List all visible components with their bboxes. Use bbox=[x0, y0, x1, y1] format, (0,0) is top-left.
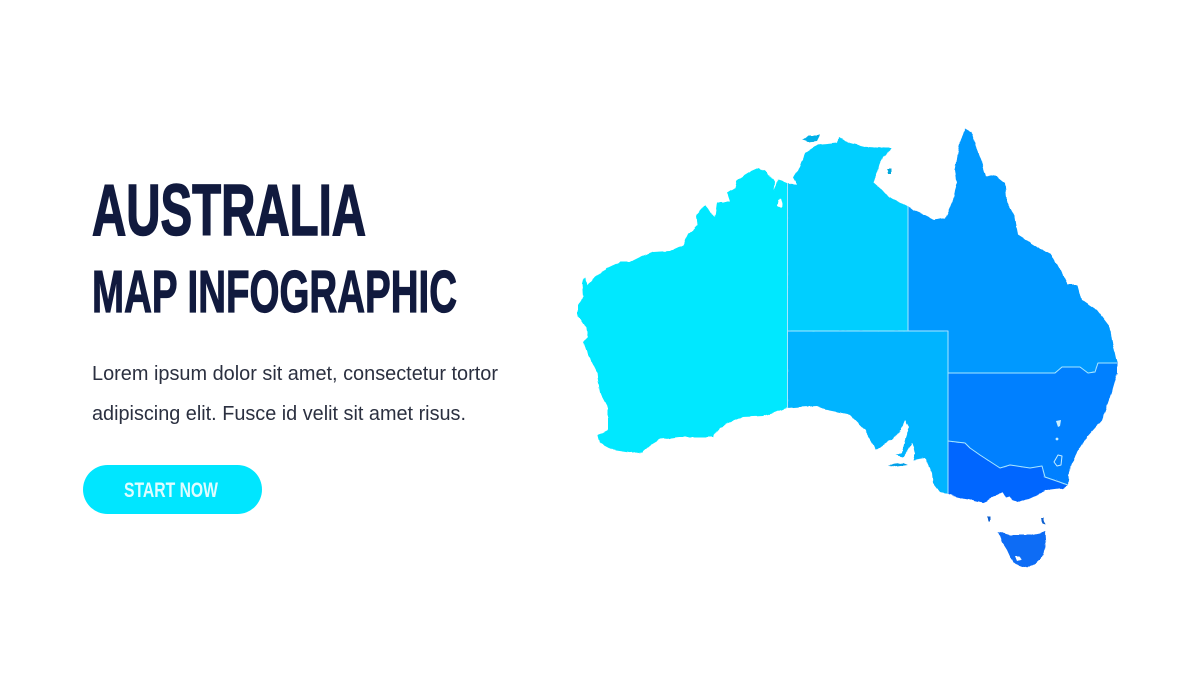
title: AUSTRALIA bbox=[92, 171, 366, 251]
region: Queensland bbox=[908, 128, 1117, 373]
region: Northern Territory bbox=[788, 137, 908, 331]
islands: Bass Strait bbox=[987, 516, 1046, 524]
map: Australia bbox=[578, 128, 1117, 568]
body text bbox=[92, 363, 498, 425]
region: Western Australia bbox=[578, 168, 788, 453]
island: Groote Eylandt bbox=[887, 169, 891, 174]
subtitle: MAP INFOGRAPHIC bbox=[92, 259, 457, 325]
region: Victoria bbox=[948, 441, 1068, 503]
button: start now: START NOW bbox=[124, 479, 218, 502]
state borders bbox=[788, 183, 1117, 494]
body text: Lorem ipsum dolor sit amet, consectetur tortor bbox=[92, 363, 498, 385]
region: New South Wales bbox=[948, 363, 1117, 485]
button: start now bbox=[83, 465, 262, 514]
island: Tiwi bbox=[802, 135, 820, 142]
region: Tasmania bbox=[998, 532, 1046, 568]
island: Kangaroo Island bbox=[889, 463, 908, 467]
ACT and lakes bbox=[1054, 420, 1062, 466]
landmass regions bbox=[578, 128, 1117, 568]
region: South Australia bbox=[788, 331, 948, 494]
body text: adipiscing elit. Fusce id velit sit amet risus. bbox=[92, 403, 466, 425]
